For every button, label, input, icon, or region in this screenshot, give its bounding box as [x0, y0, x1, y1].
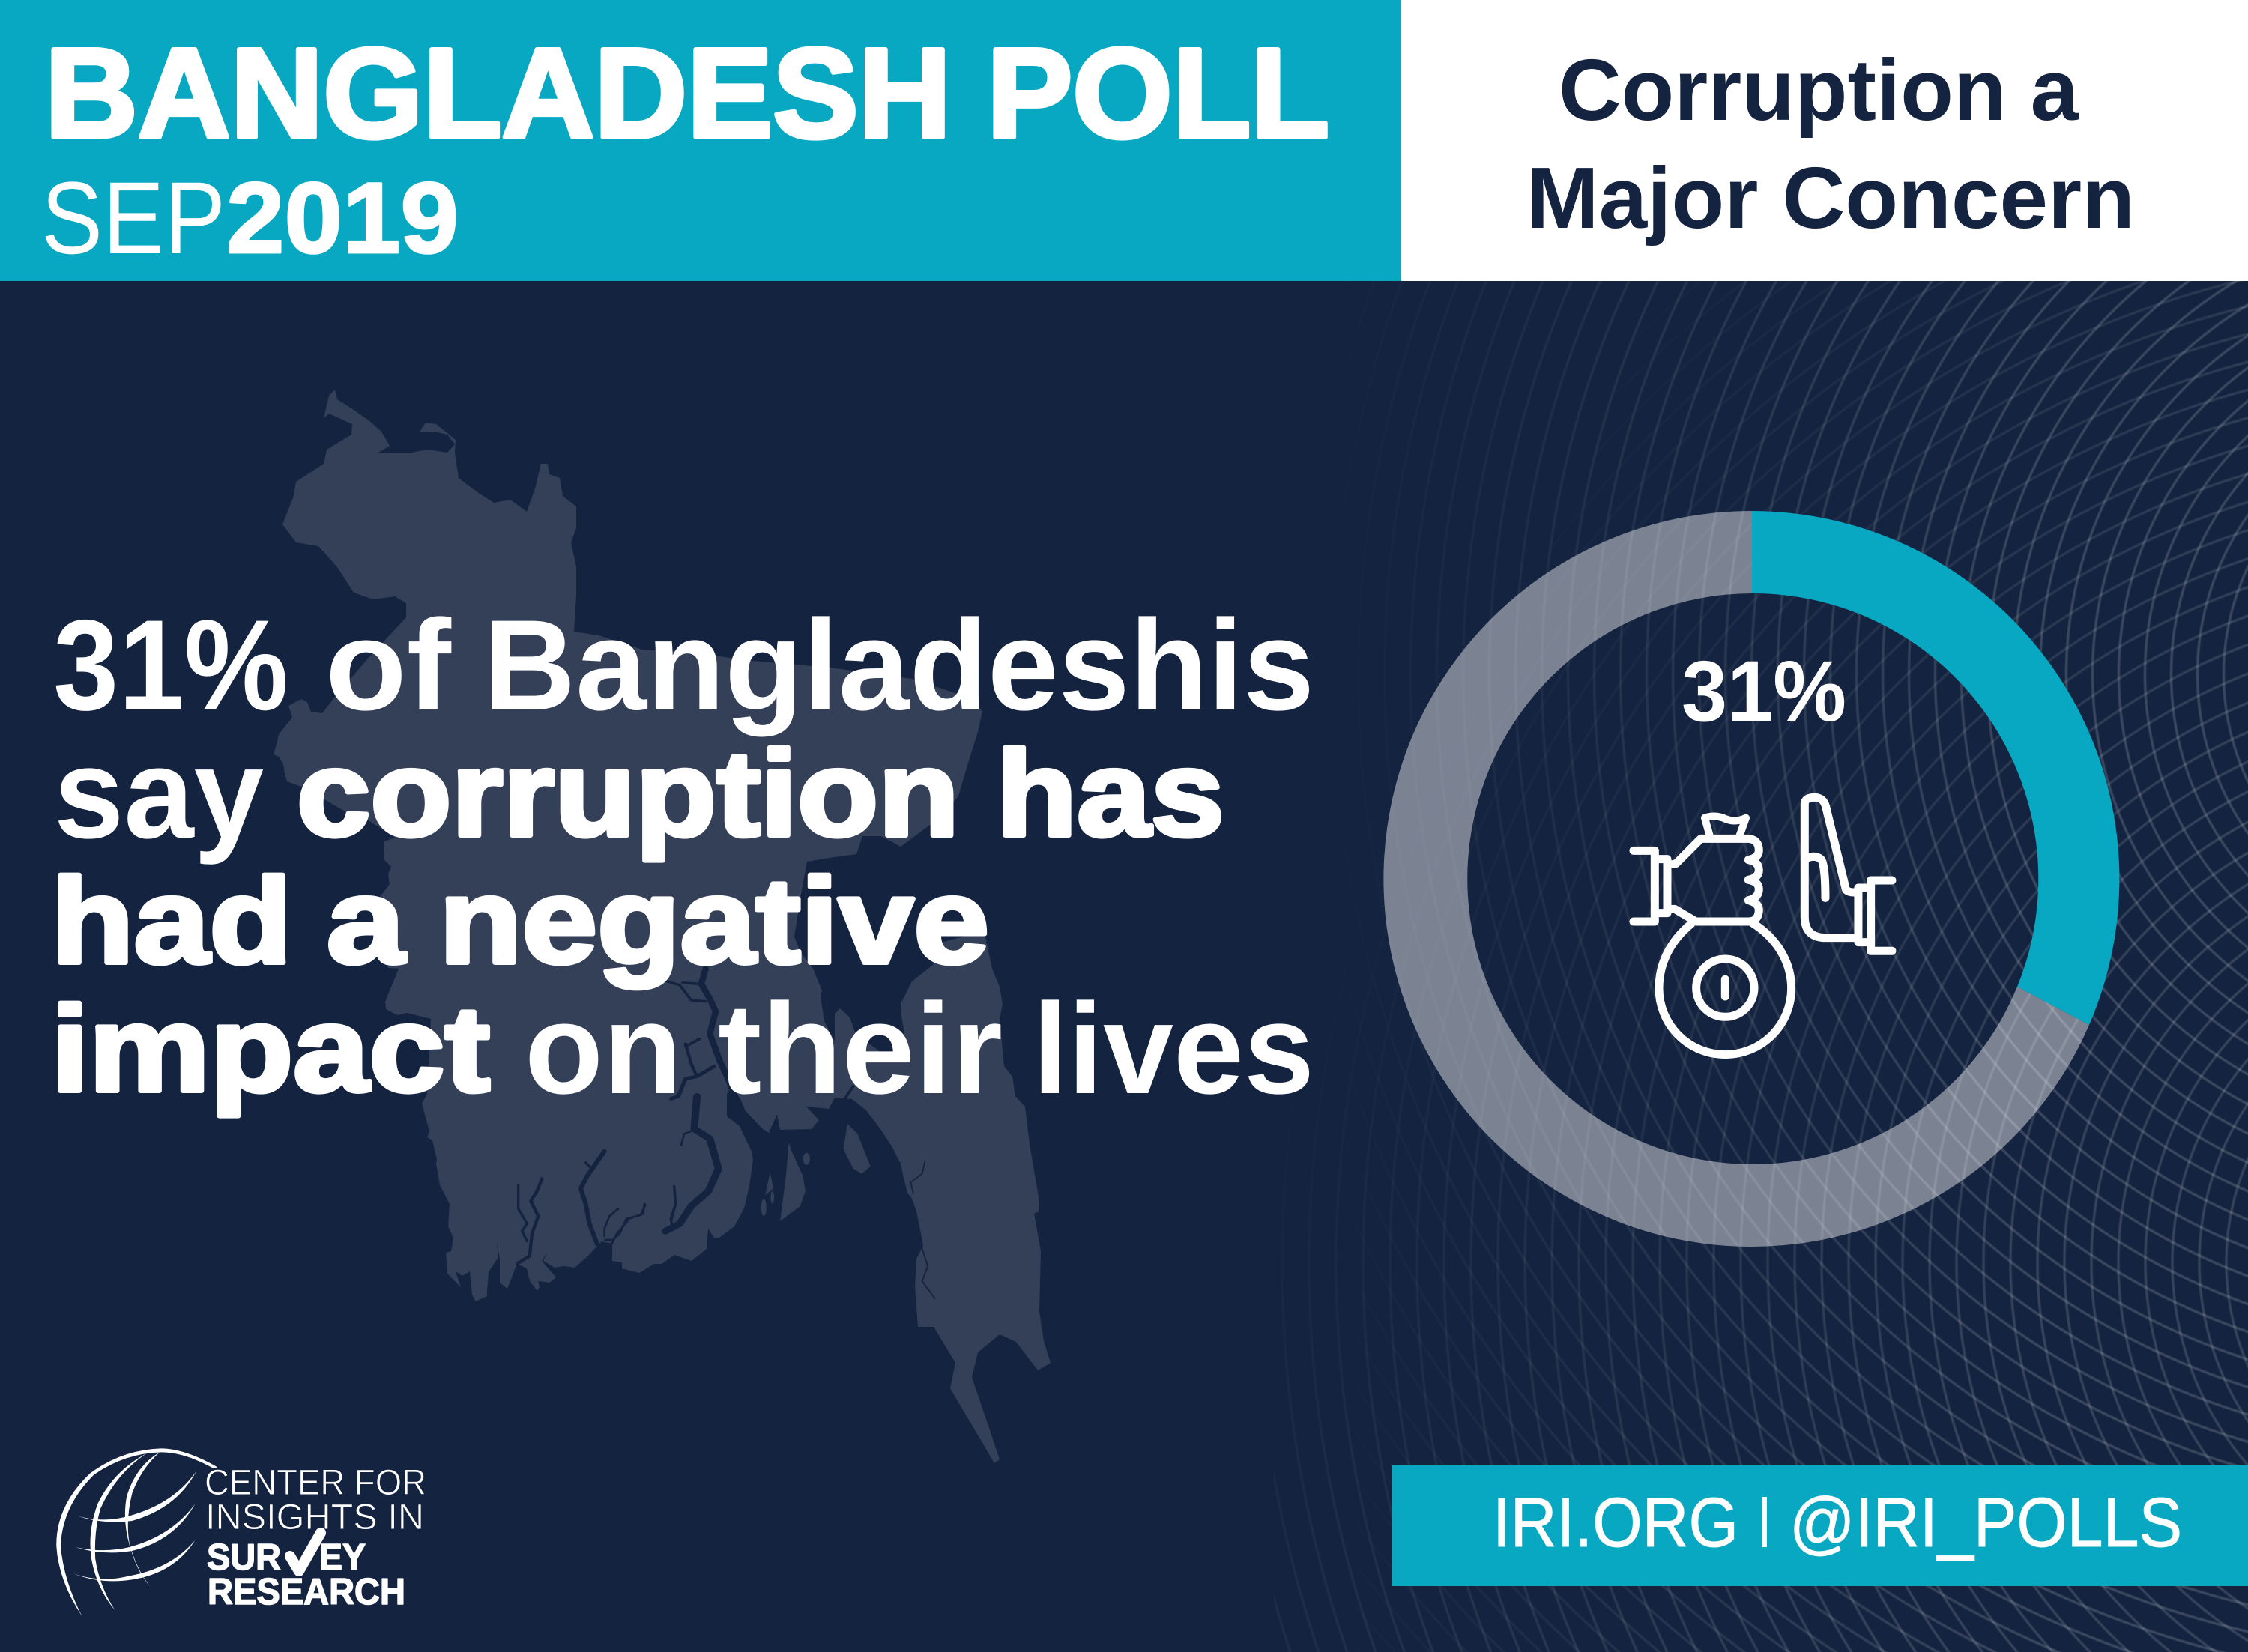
header panel: subject on white [1401, 0, 2248, 281]
logo wordmark: INSIGHTS IN [205, 1498, 424, 1537]
main statement: their [718, 977, 1003, 1121]
date: SEP [41, 161, 226, 276]
main statement: negative [439, 853, 989, 989]
main statement: corruption has [297, 726, 1224, 862]
logo globe [56, 1448, 217, 1616]
icon: bribe money bag refused by raised hand [1634, 797, 1892, 1055]
logo wordmark [205, 1463, 426, 1612]
footer bar: website and handle [1392, 1465, 2248, 1586]
map of Bangladesh [274, 390, 1051, 1463]
main statement: impact [51, 981, 490, 1117]
date [41, 161, 459, 276]
main statement: 31% [53, 593, 288, 737]
donut chart: 31% [1383, 511, 2119, 1247]
header panel: subject on white: Corruption a [1559, 41, 2079, 139]
logo wordmark: CENTER FOR [205, 1463, 426, 1503]
logo wordmark: RESEARCH [208, 1572, 405, 1612]
logo: Center for Insights in Survey Research [56, 1448, 426, 1616]
footer bar: website and handle: IRI.ORG [1493, 1483, 1738, 1561]
main statement: say [54, 721, 264, 865]
main statement: of [325, 593, 452, 737]
header panel: subject on white: Major Concern [1526, 149, 2135, 246]
main statement: on [525, 977, 682, 1121]
logo wordmark: EY [319, 1537, 366, 1578]
logo wordmark: SUR [207, 1537, 281, 1578]
main statement: Bangladeshis [483, 593, 1314, 737]
main statement: a [327, 853, 406, 989]
title: BANGLADESH POLL [45, 22, 1329, 165]
footer bar: website and handle: @IRI_POLLS [1789, 1483, 2182, 1561]
donut value: 31% [1682, 644, 1846, 739]
main statement: lives [1033, 977, 1314, 1121]
main statement [51, 593, 1314, 1121]
main statement: had [51, 853, 292, 989]
date: 2019 [226, 163, 459, 274]
header band: teal title panel [0, 0, 1401, 281]
